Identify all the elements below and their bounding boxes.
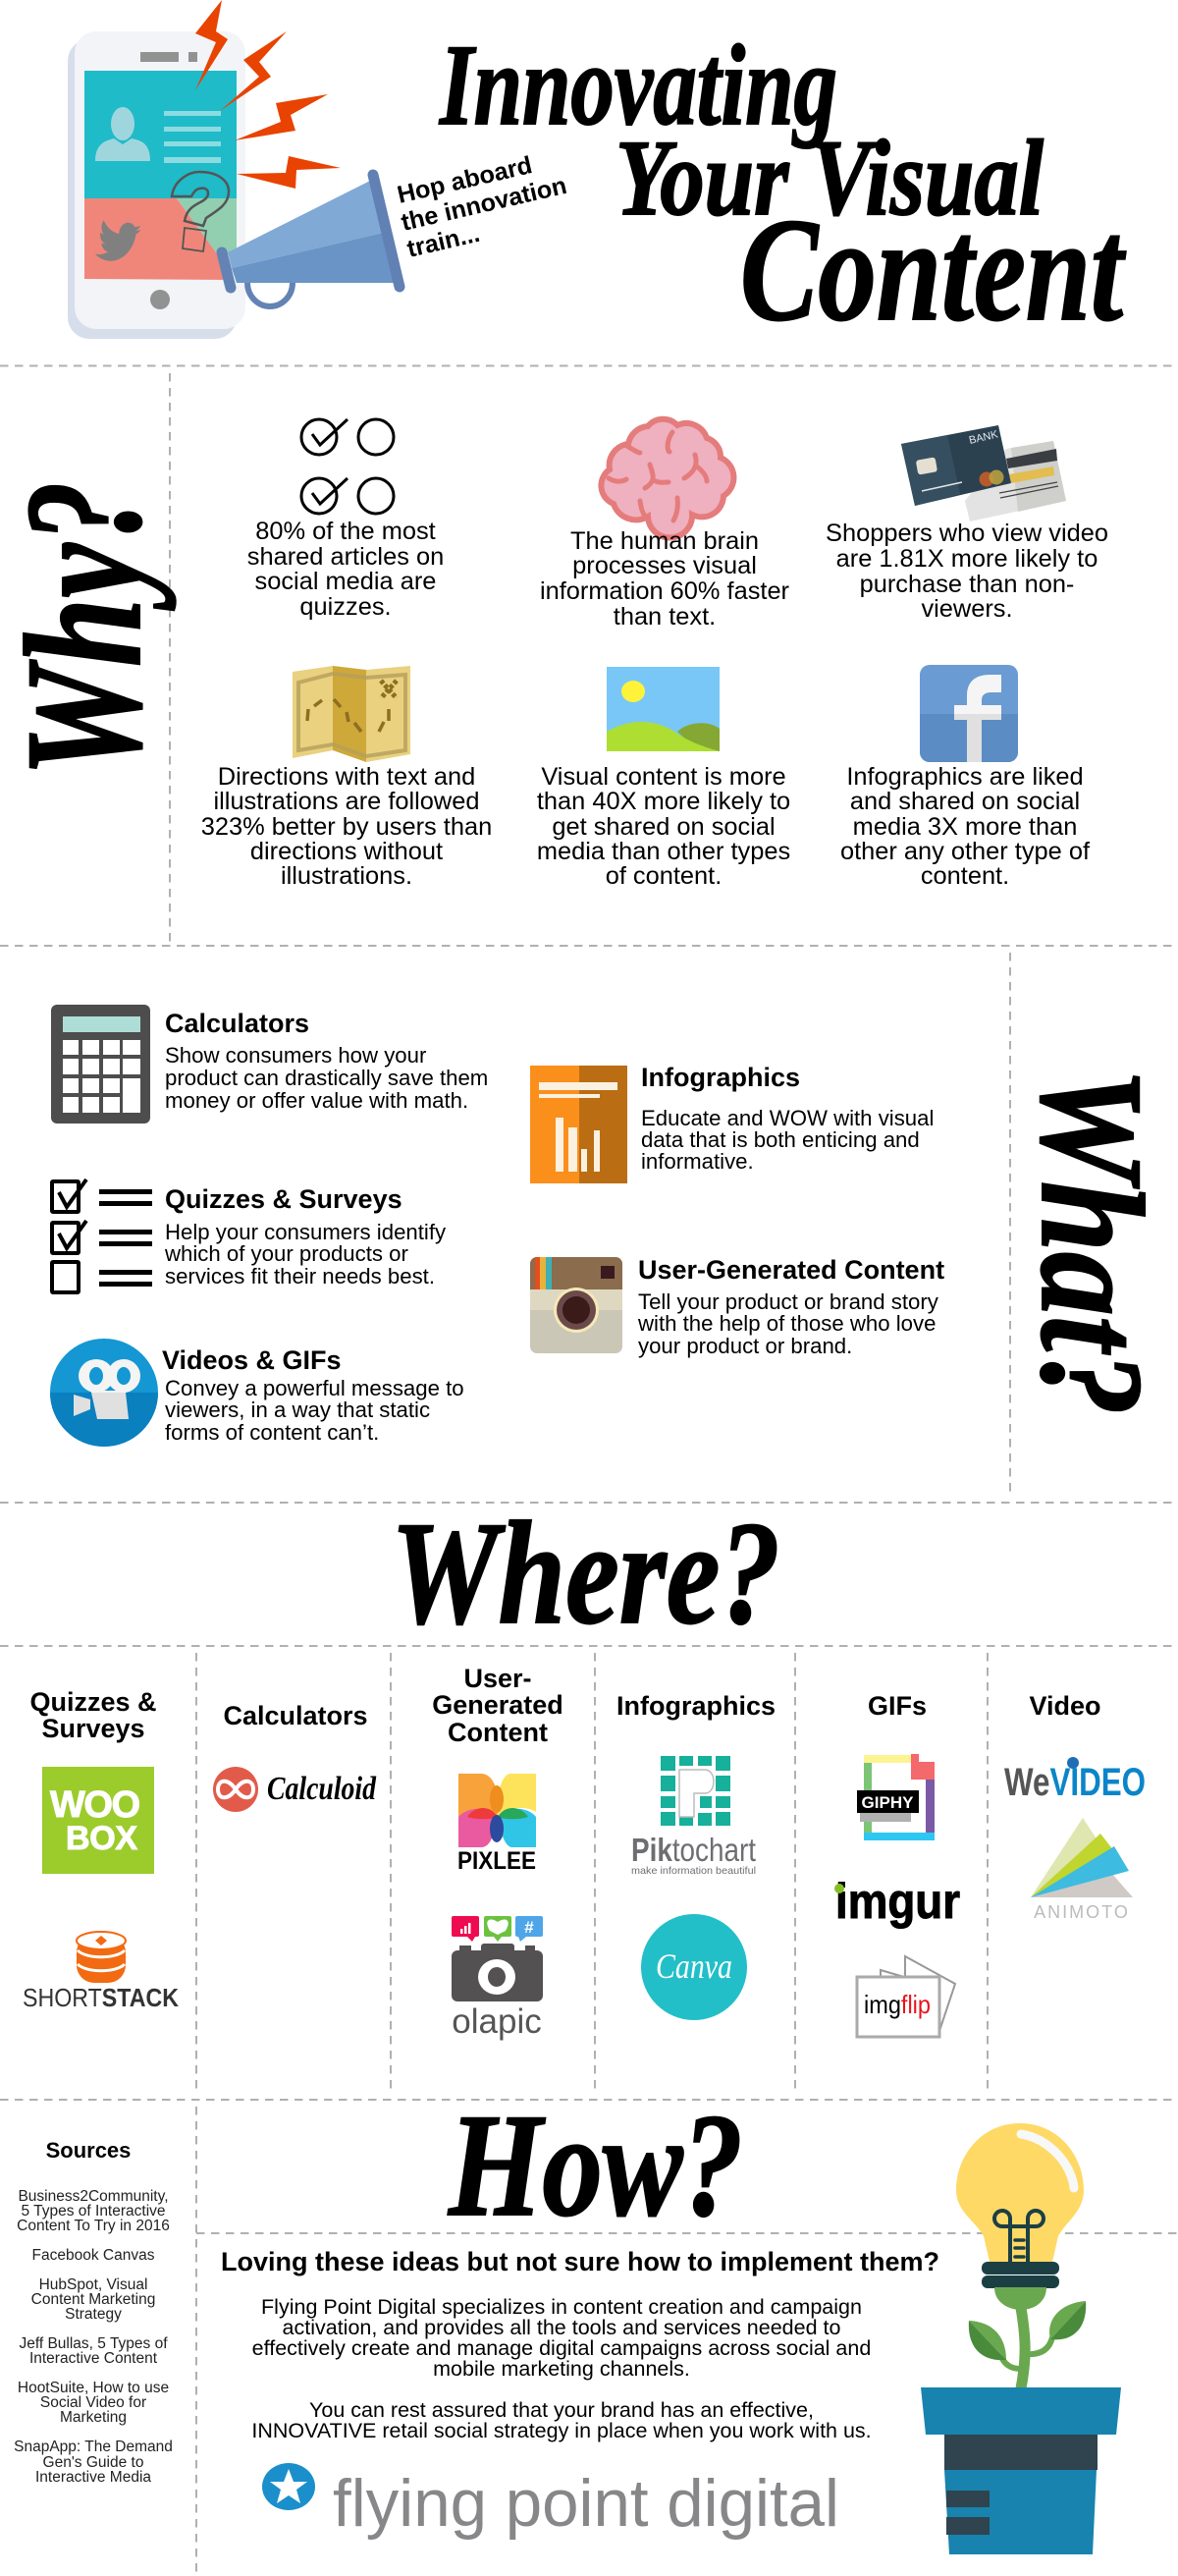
column: video: Video (1029, 1691, 1101, 1721)
stat: visual content: media than other types (537, 838, 790, 865)
logo: olapic (452, 1916, 543, 2041)
item: infographics: informative. (641, 1149, 754, 1174)
sources list: Interactive Media (35, 2469, 151, 2486)
sources list (14, 2138, 173, 2486)
logo: shortstack: SHORTSTACK (23, 1983, 179, 2012)
callout: hop aboard: Hop aboard (395, 151, 535, 209)
icon: infographic document (530, 1066, 627, 1183)
stat: quizzes: shared articles on (247, 543, 444, 571)
stat: infographics: other any other type of (840, 838, 1091, 865)
stat: infographics: and shared on social (850, 788, 1080, 815)
logo: piktochart: make information beautiful (631, 1865, 756, 1877)
icon: checklist (52, 1179, 152, 1292)
stat: visual content: Visual content is more (541, 763, 786, 791)
logo: wevideo: WeVIDEO (1004, 1761, 1146, 1804)
callout: hop aboard: train... (404, 220, 482, 263)
column: calculators (213, 1701, 377, 1812)
item: user-generated content: Tell your product or brand story (638, 1289, 939, 1314)
paragraph: services: effectively create and manage digital campaigns across social and (252, 2336, 871, 2360)
title: Innovating (438, 21, 837, 149)
icon: video camera (50, 1339, 158, 1447)
stat: quizzes: 80% of the most (255, 518, 436, 545)
item: calculators: product can drastically save them (165, 1066, 488, 1090)
logo: giphy: GIPHY (862, 1793, 914, 1812)
item: quizzes and surveys: Quizzes & Surveys (165, 1184, 402, 1214)
panel: why (0, 419, 1108, 890)
stat: visual content: get shared on social (552, 813, 776, 841)
icon: bank cards (901, 425, 1066, 521)
icon: instagram camera (530, 1257, 622, 1353)
subheading: Loving these ideas but not sure how to implement them? (221, 2247, 939, 2276)
logo: imgur: imgur (835, 1874, 960, 1929)
column: user-generated content (432, 1664, 563, 2041)
item: user-generated content: your product or brand. (638, 1334, 852, 1358)
icon: treasure map (293, 666, 410, 762)
item: calculators: Calculators (165, 1009, 309, 1038)
stat: directions: illustrations. (281, 862, 412, 890)
logo: pixlee: PIXLEE (457, 1847, 536, 1875)
logo: woobox: BOX (66, 1820, 137, 1857)
paragraph: services: Flying Point Digital specializes in content creation and campaign (261, 2295, 862, 2319)
sources list: Jeff Bullas, 5 Types of (19, 2335, 168, 2352)
heading: how: How? (447, 2084, 743, 2247)
stat: brain: information 60% faster (540, 577, 790, 605)
item: infographics (641, 1063, 934, 1174)
sources list: Interactive Content (29, 2350, 158, 2367)
paragraph: assurance: You can rest assured that your brand has an effective, (309, 2398, 814, 2422)
logo: shortstack (23, 1932, 179, 2012)
stat: infographics: media 3X more than (853, 813, 1077, 841)
sources list: Gen's Guide to (43, 2454, 143, 2471)
icon: bank cards: BANK (968, 428, 1000, 447)
sources list: Sources (46, 2138, 131, 2163)
icon: brain (601, 419, 733, 538)
sources list: HubSpot, Visual (39, 2276, 147, 2293)
panel: how (14, 2084, 1121, 2554)
sources list: Social Video for (40, 2394, 146, 2411)
column: gifs (834, 1691, 960, 2037)
logo: imgflip (857, 1956, 955, 2037)
stat: quizzes: social media are (255, 568, 436, 595)
stat: shoppers: Shoppers who view video (826, 520, 1108, 547)
icon: smartphone (68, 31, 245, 339)
item: videos and gifs: viewers, in a way that static (165, 1398, 430, 1422)
icon: calculator (51, 1005, 150, 1124)
column: user-generated content: Content (448, 1718, 548, 1747)
callout: hop aboard (395, 151, 569, 263)
stat: directions: Directions with text and (218, 763, 475, 791)
heading: where: Where? (391, 1492, 780, 1655)
column: quizzes and surveys (23, 1687, 179, 2012)
logo: flying point digital: flying point digital (333, 2466, 839, 2541)
logo: giphy (857, 1754, 935, 1840)
item: calculators: Show consumers how your (165, 1043, 427, 1068)
stat: brain: than text. (614, 603, 716, 630)
logo: imgflip: imgflip (864, 1990, 931, 2019)
icon: landscape picture (607, 667, 720, 751)
panel: header (68, 0, 1126, 352)
stat: quizzes: quizzes. (299, 593, 392, 621)
sources list: Business2Community, (18, 2188, 169, 2205)
logo: canva: Canva (656, 1946, 732, 1986)
logo: animoto (1031, 1818, 1133, 1922)
title (438, 21, 1126, 352)
sources list: SnapApp: The Demand (14, 2439, 173, 2455)
item: videos and gifs (162, 1345, 464, 1445)
item: infographics: Educate and WOW with visual (641, 1106, 934, 1130)
item: quizzes and surveys (164, 1184, 447, 1288)
stat: directions: directions without (250, 838, 443, 865)
sources list: Content Marketing (31, 2291, 155, 2308)
icon: lightning bolts (195, 0, 341, 189)
logo: olapic: olapic (452, 2002, 542, 2041)
column: calculators: Calculators (223, 1701, 368, 1730)
column: video (1004, 1691, 1146, 1922)
item: user-generated content: with the help of those who love (637, 1311, 936, 1336)
logo: olapic: # (524, 1918, 534, 1937)
column: user-generated content: User- (463, 1664, 532, 1693)
item: quizzes and surveys: Help your consumers identify (165, 1220, 447, 1244)
logo: calculoid (213, 1767, 377, 1812)
stat: visual content: of content. (606, 862, 722, 890)
title: Your Visual (616, 118, 1044, 238)
item: videos and gifs: Convey a powerful message to (165, 1376, 464, 1400)
sources list: Content To Try in 2016 (17, 2218, 170, 2234)
stat: infographics: Infographics are liked (846, 763, 1084, 791)
item: quizzes and surveys: services fit their needs best. (165, 1264, 435, 1288)
item: calculators (165, 1009, 488, 1113)
icon: facebook (920, 665, 1018, 762)
stat: brain: The human brain (570, 527, 759, 555)
column: infographics: Infographics (616, 1691, 776, 1721)
item: user-generated content (637, 1255, 944, 1358)
item: calculators: money or offer value with math. (165, 1088, 468, 1113)
stat: shoppers: are 1.81X more likely to (836, 545, 1098, 573)
item: videos and gifs: forms of content can’t. (165, 1420, 379, 1445)
heading: what: What? (1010, 1068, 1173, 1415)
logo: woobox: WOO (50, 1784, 140, 1826)
item: user-generated content: User-Generated Content (638, 1255, 944, 1285)
icon: light bulb plant (921, 2123, 1121, 2554)
sources list: Facebook Canvas (32, 2247, 155, 2264)
logo: piktochart (631, 1756, 756, 1877)
stat: visual content: than 40X more likely to (537, 788, 790, 815)
sources list: 5 Types of Interactive (21, 2203, 166, 2220)
logo: piktochart: Piktochart (631, 1832, 756, 1868)
stat: infographics: content. (921, 862, 1009, 890)
callout: hop aboard: the innovation (399, 172, 569, 237)
stat: directions: 323% better by users than (201, 813, 492, 841)
sources list: Strategy (65, 2306, 122, 2323)
logo: pixlee (457, 1774, 536, 1875)
sources list: HootSuite, How to use (18, 2380, 169, 2396)
column: gifs: GIFs (868, 1691, 927, 1721)
logo: canva (641, 1914, 747, 2020)
logo: woobox (42, 1767, 154, 1874)
item: videos and gifs: Videos & GIFs (162, 1345, 342, 1375)
column: quizzes and surveys: Quizzes & (29, 1687, 157, 1717)
item: infographics: data that is both enticing and (641, 1127, 920, 1152)
icon: checks and circles (301, 419, 394, 514)
column: quizzes and surveys: Surveys (41, 1714, 145, 1743)
stat: brain: processes visual (572, 552, 757, 579)
icon: megaphone (222, 175, 400, 306)
sources list: Marketing (60, 2409, 127, 2426)
stat: shoppers: viewers. (921, 595, 1013, 623)
column: user-generated content: Generated (432, 1690, 563, 1720)
paragraph: services: activation, and provides all the tools and services needed to (283, 2316, 840, 2339)
paragraph: assurance: INNOVATIVE retail social strategy in place when you work with us. (251, 2419, 872, 2442)
stat: directions: illustrations are followed (214, 788, 479, 815)
logo: calculoid: Calculoid (267, 1771, 377, 1807)
item: quizzes and surveys: which of your products or (164, 1241, 408, 1266)
stat: shoppers: purchase than non- (860, 571, 1074, 598)
panel: what (50, 1005, 1173, 1447)
item: infographics: Infographics (641, 1063, 800, 1092)
panel: where (23, 1492, 1146, 2041)
column: infographics (616, 1691, 776, 2020)
logo: animoto: ANIMOTO (1034, 1902, 1130, 1922)
paragraph: services: mobile marketing channels. (433, 2357, 690, 2381)
